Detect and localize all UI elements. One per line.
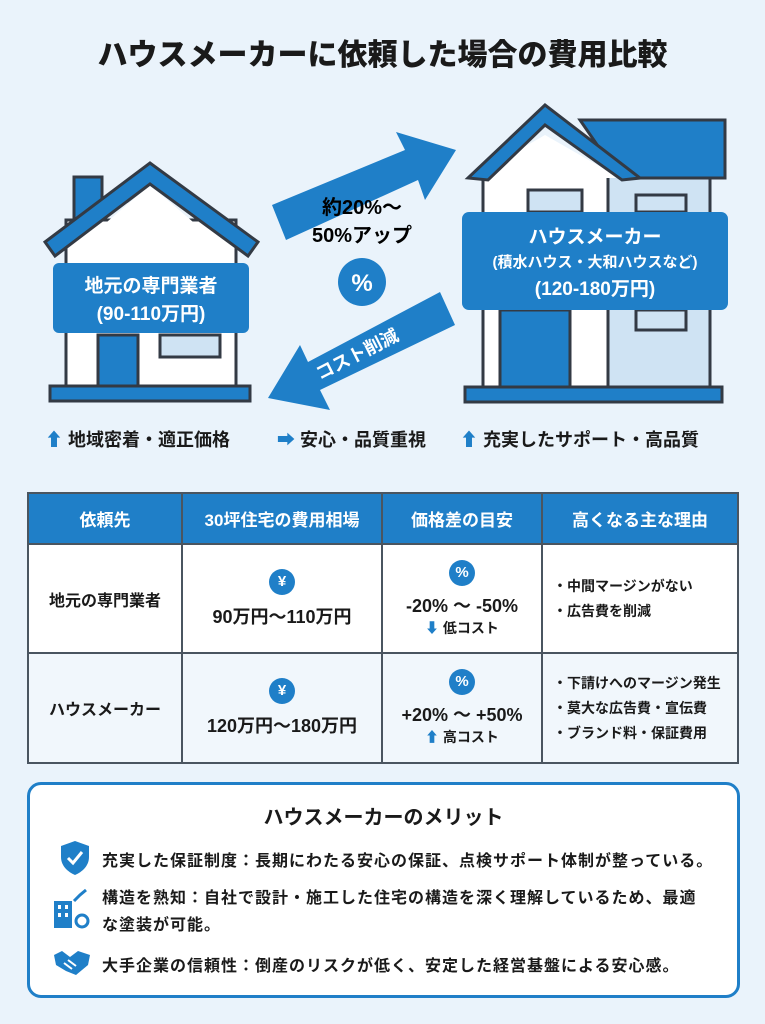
feature labels — [45, 430, 699, 450]
icon: handshake — [54, 951, 90, 975]
comparison table: 依頼先 — [80, 511, 130, 530]
label: local: 地元の専門業者 — [84, 275, 218, 297]
feature labels: ⬆ 充実したサポート・高品質 — [460, 430, 699, 450]
comparison table: ⬇ 低コスト — [425, 620, 499, 636]
merit 2: 構造を熟知：自社で設計・施工した住宅の構造を深く理解しているため、最適 — [102, 890, 697, 907]
icon: shield — [61, 841, 89, 875]
comparison table: % — [455, 564, 469, 580]
label: local — [53, 263, 249, 333]
arrow: down — [268, 292, 455, 410]
comparison table: ¥ — [278, 682, 286, 699]
comparison table: +20% 〜 +50% — [401, 705, 523, 725]
comparison table: ・広告費を削減 — [553, 602, 651, 618]
label: house maker: (積水ハウス・大和ハウスなど) — [492, 253, 698, 271]
comparison table: % — [455, 673, 469, 690]
merit 2: な塗装が可能。 — [102, 917, 221, 934]
merits heading: ハウスメーカーのメリット — [264, 807, 504, 829]
comparison table: -20% 〜 -50% — [406, 596, 518, 616]
comparison table: 30坪住宅の費用相場 — [205, 511, 359, 530]
label: house maker — [462, 212, 728, 310]
panel: merits — [27, 782, 740, 998]
arrow: up — [272, 132, 456, 247]
label: house maker: (120-180万円) — [535, 279, 655, 300]
comparison table: ハウスメーカー — [49, 702, 161, 719]
title: ハウスメーカーに依頼した場合の費用比較 — [98, 39, 668, 72]
arrow: up: 約20%〜 — [322, 196, 402, 219]
comparison table: 地元の専門業者 — [49, 592, 161, 610]
feature labels: ➡ 安心・品質重視 — [277, 430, 426, 450]
comparison table: ・莫大な広告費・宣伝費 — [553, 700, 707, 716]
arrow: up: 50%アップ — [312, 224, 412, 247]
comparison table: 高くなる主な理由 — [572, 511, 708, 530]
illustration: houses and arrows — [43, 103, 728, 410]
comparison table: ・下請けへのマージン発生 — [553, 674, 721, 690]
icon: building — [54, 888, 90, 928]
merit 2 — [102, 889, 697, 934]
house: house maker — [465, 105, 725, 402]
merit 1: 充実した保証制度：長期にわたる安心の保証、点検サポート体制が整っている。 — [102, 853, 713, 870]
label: house maker: ハウスメーカー — [528, 226, 662, 248]
comparison table: 90万円〜110万円 — [212, 606, 352, 626]
comparison table: 120万円〜180万円 — [207, 716, 357, 736]
merit 3: 大手企業の信頼性：倒産のリスクが低く、安定した経営基盤による安心感。 — [102, 958, 680, 975]
arrow: down: コスト削減 — [312, 324, 402, 384]
feature labels: ⬆ 地域密着・適正価格 — [45, 430, 230, 450]
icon: percent — [338, 258, 386, 306]
comparison table: 価格差の目安 — [411, 511, 513, 530]
comparison table: ⬆ 高コスト — [425, 729, 499, 745]
comparison table: ・ブランド料・保証費用 — [553, 724, 707, 740]
comparison table — [27, 492, 739, 764]
comparison table: ¥ — [278, 572, 286, 590]
house: local contractor — [45, 163, 258, 401]
comparison table: ・中間マージンがない — [553, 578, 693, 594]
icon: percent: % — [351, 270, 373, 297]
label: local: (90-110万円) — [97, 304, 205, 325]
